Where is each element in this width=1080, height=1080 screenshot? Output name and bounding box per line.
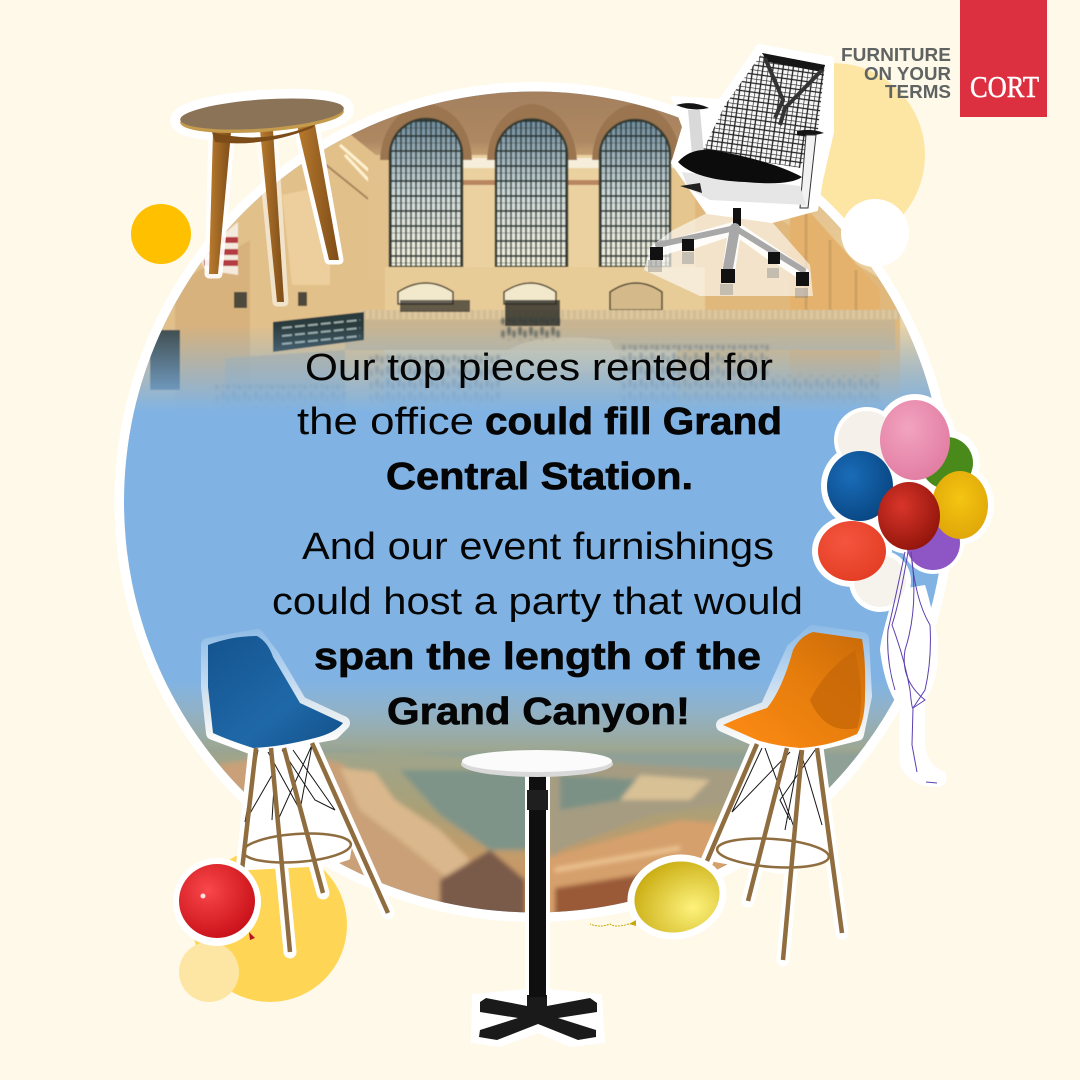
chair column: [733, 208, 741, 226]
stool seat: [723, 632, 865, 748]
flag: [198, 222, 238, 275]
balloon: pink: [880, 400, 950, 480]
main text block: [272, 347, 803, 733]
logo tagline: FURNITURE: [841, 45, 951, 65]
logo tagline: ON YOUR: [864, 64, 951, 84]
balloon: orange red: [818, 521, 886, 581]
stool legs: [707, 744, 842, 960]
red balloon, bottom left: [173, 858, 261, 946]
decorative circle: pale bottom left: [179, 942, 239, 1002]
text: paragraph 1: Our top pieces rented for: [305, 347, 773, 389]
text: paragraph 2: could host a party that would: [272, 581, 803, 623]
table outline: [179, 94, 345, 302]
stool legs: [242, 743, 388, 952]
photo: Grand Canyon: [156, 660, 894, 912]
photo: Grand Central Station hall: [128, 92, 932, 440]
table base: [479, 995, 597, 1040]
circular ring: [114, 82, 954, 922]
pillars: [462, 154, 496, 246]
chair white cutout: base: [644, 213, 813, 296]
text: paragraph 2: Grand Canyon!: [387, 691, 690, 733]
blue fade over hall: [127, 329, 932, 450]
lower arches: [398, 283, 453, 304]
dark panel left: [150, 330, 180, 390]
balloon bunch, right: [812, 394, 994, 787]
ticket booth: [225, 350, 345, 388]
seat shell: [682, 172, 806, 205]
base blue: [124, 92, 939, 912]
balloon: white bottom: [854, 555, 906, 607]
stool ring: [242, 830, 352, 866]
chair white cutout: body: [672, 45, 833, 222]
central bridge: [510, 338, 614, 350]
casters: [650, 239, 809, 286]
lower stone band: [385, 267, 705, 312]
logo tagline: [841, 45, 951, 102]
yellow balloon, bottom centre right: [590, 844, 736, 950]
logo: CORT: CORT: [970, 69, 1039, 104]
balloon: red: [878, 482, 940, 550]
shadows of casters: [648, 252, 808, 298]
mesh backrest: [702, 53, 825, 168]
armrests: [688, 110, 704, 155]
balloon: blue: [827, 451, 893, 521]
left wall: [142, 134, 386, 380]
pillar capitals: [462, 158, 496, 168]
text: paragraph 1: the office: [297, 401, 474, 443]
text: paragraph 1: Central Station.: [386, 456, 693, 498]
table top: [179, 96, 345, 138]
stool wires: [732, 748, 822, 830]
crowd: [216, 316, 878, 398]
balloon: white: [838, 411, 896, 469]
chair white cutout: star legs: [658, 228, 803, 275]
balloon: green: [921, 437, 973, 489]
seat cushion: [678, 150, 802, 183]
logo: CORT: [960, 0, 1047, 117]
text: paragraph 2: span the length of the: [314, 636, 761, 678]
stool seat: [208, 636, 343, 748]
logo tagline: TERMS: [885, 82, 951, 102]
blue bar stool, left: [208, 636, 388, 952]
office chair, top right: [644, 45, 833, 298]
balloon: yellow: [932, 471, 988, 539]
balcony: [360, 310, 900, 320]
decorative circle: yellow bottom left: [193, 848, 347, 1002]
bright white circle near chair: [841, 199, 909, 267]
chair base: [658, 228, 803, 270]
arch surrounds: [380, 104, 472, 160]
blue fade over canyon: [144, 630, 894, 745]
balloon: purple: [906, 516, 960, 570]
balloon strings: [888, 552, 937, 783]
arched windows: [390, 119, 670, 267]
text: paragraph 1: [297, 347, 782, 498]
table top: [461, 751, 613, 777]
balloons outline: [812, 394, 994, 787]
right wall: [676, 198, 900, 391]
side table, top left: [179, 94, 345, 302]
text: paragraph 2: And our event furnishings: [302, 526, 774, 568]
text: paragraph 2: [272, 526, 803, 733]
table outline: [472, 770, 604, 1046]
text: paragraph 1: could fill Grand: [485, 401, 782, 443]
stool outline: [707, 632, 865, 960]
table post: [529, 775, 546, 997]
decorative circle: pale yellow top right: [741, 63, 925, 247]
table legs: [209, 132, 231, 274]
orange bar stool, right: [707, 632, 865, 960]
stool outline: [208, 636, 388, 952]
high round table, bottom centre: [461, 750, 613, 1046]
decorative circle: amber left: [131, 204, 191, 264]
stool wires: [245, 745, 335, 822]
departure board: [273, 312, 364, 352]
stool ring: [716, 835, 830, 871]
photo circle: [124, 92, 939, 912]
